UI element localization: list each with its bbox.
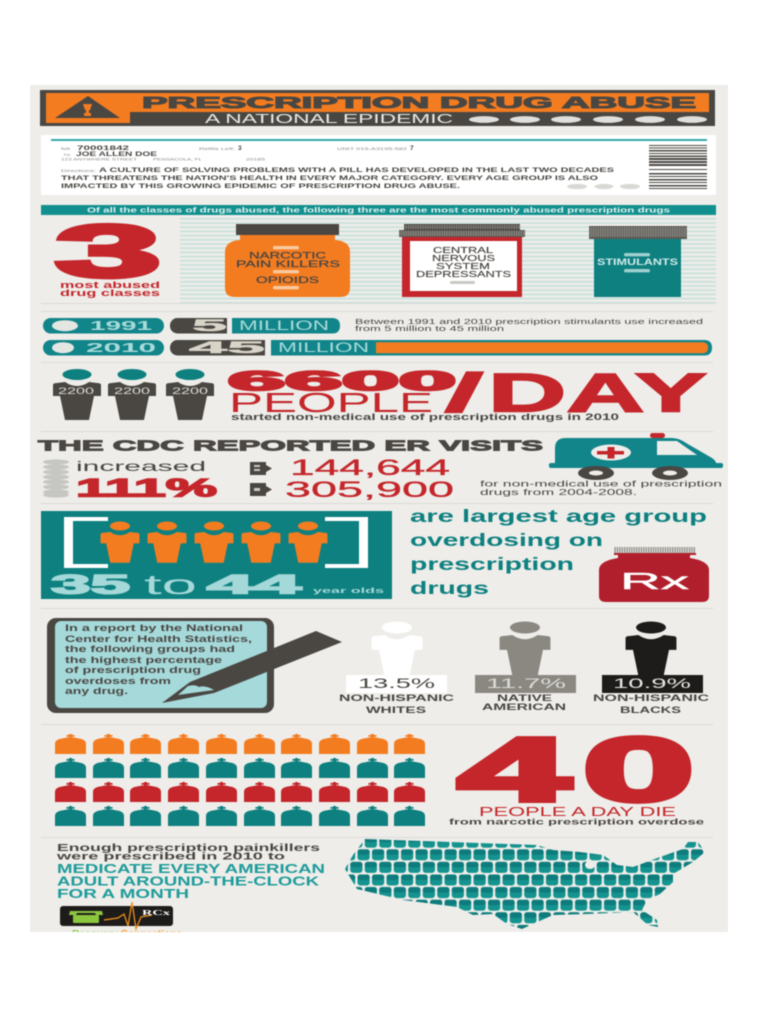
label small fields: For: [64, 152, 71, 157]
age group text: are largest age group [410, 506, 707, 526]
increased 111%: 111% [76, 474, 217, 502]
big number 40 [458, 720, 694, 820]
group: non-Hispanic blacks [593, 622, 710, 715]
group: Native American: AMERICAN [482, 702, 566, 712]
painkillers text: Enough prescription painkillers [57, 842, 320, 854]
stat description: Between 1991 and 2010 prescription stimulants use increased [355, 317, 703, 326]
label small fields: Refill [61, 146, 70, 151]
ER counts with icons: 144,644 [290, 455, 450, 480]
label small fields: Refills Left: [199, 146, 235, 151]
bottle: depressants [399, 224, 525, 297]
stat row: 2010: MILLION [278, 340, 369, 355]
background panel [30, 85, 728, 932]
icon: Rx bottle: Rx [620, 568, 690, 594]
6600 people per day: / [442, 361, 487, 424]
ER visits heading: THE CDC REPORTED ER VISITS [38, 438, 543, 454]
subtitle: A NATIONAL EPIDEMIC [205, 112, 453, 126]
group: non-Hispanic blacks: BLACKS [620, 705, 681, 715]
directions text: A CULTURE OF SOLVING PROBLEMS WITH A PILL HAS DEVELOPED IN THE LAST TWO DECADES [99, 167, 615, 174]
stat row: 1991 [43, 316, 340, 335]
big number 3: 3 [55, 210, 161, 292]
big number 40: 4 [458, 720, 570, 820]
group: non-Hispanic whites: WHITES [366, 705, 426, 715]
painkillers text: ADULT AROUND-THE-CLOCK [57, 874, 319, 888]
people icons 2200: 2200 [114, 386, 150, 397]
panel: report note: In a report by the National [65, 623, 243, 633]
panel: 35 to 44 [41, 511, 392, 600]
directions text [61, 167, 615, 190]
teal banner [41, 205, 716, 215]
people icons 2200: 2200 [58, 386, 94, 397]
stat row: 1991: MILLION [239, 318, 329, 333]
label small fields: JOE ALLEN DOE [76, 152, 157, 158]
bottle grid: 40 bottles [55, 734, 425, 826]
40 caption: from narcotic prescription overdose [449, 816, 704, 826]
ER counts with icons: 305,900 [285, 477, 454, 502]
label small fields [61, 145, 414, 162]
map: United States of pill cells [345, 839, 705, 929]
panel: report note: overdoses from [65, 676, 171, 686]
ER caption [480, 478, 722, 497]
label small fields: PENSACOLA, FL [153, 158, 202, 162]
people icons 2200 [53, 369, 214, 420]
group: non-Hispanic whites: 13.5% [358, 675, 435, 691]
big number 3: most abused [60, 280, 160, 291]
title: PRESCRIPTION DRUG ABUSE [142, 95, 696, 112]
age group text: prescription [410, 554, 574, 574]
small pills [567, 184, 640, 189]
painkillers text: MEDICATE EVERY AMERICAN [57, 862, 325, 876]
painkillers text: were prescribed in 2010 to [55, 850, 285, 862]
painkillers text [55, 842, 325, 901]
people icons 2200: 2200 [172, 386, 208, 397]
increased 111%: increased [76, 458, 206, 474]
age group text [410, 506, 707, 598]
6600 people per day [228, 361, 707, 424]
stat description [355, 317, 703, 333]
prescription label panel [41, 135, 716, 195]
directions text: Directions: [61, 168, 96, 173]
bottle: stimulants [589, 226, 687, 297]
ER caption: drugs from 2004-2008. [480, 487, 637, 497]
panel: 35 to 44: 35 [51, 570, 130, 600]
stat row: 2010 [43, 338, 712, 357]
stat row: 1991: 1991 [90, 318, 152, 333]
label small fields: 20185 [246, 158, 265, 162]
icon: pill stack [43, 459, 69, 498]
bottle: depressants: NERVOUS [432, 254, 496, 263]
panel: report note: any drug. [65, 686, 128, 696]
panel: report note [47, 618, 342, 713]
6600 caption: started non-medical use of prescription drugs in 2010 [231, 412, 619, 422]
label small fields: 7 [410, 145, 414, 152]
panel: 35 to 44: 44 [207, 570, 302, 600]
painkillers text: FOR A MONTH [57, 887, 189, 901]
group: non-Hispanic whites [339, 622, 455, 715]
panel: report note: the highest percentage [65, 655, 222, 665]
icon: warning triangle with mortar [55, 96, 120, 118]
stat row: 2010: 2010 [86, 340, 156, 355]
6600 people per day: DAY [488, 362, 707, 424]
panel: report note: the following groups had [65, 644, 235, 654]
panel: report note: of prescription drug [65, 665, 201, 675]
barcode [649, 145, 707, 189]
ER caption: for non-medical use of prescription [480, 478, 722, 488]
group: Native American [475, 622, 576, 712]
brackets [64, 517, 368, 568]
6600 people per day: PEOPLE [229, 387, 433, 418]
label small fields: 3 [238, 145, 242, 152]
group: Native American: NATIVE [497, 693, 552, 703]
big number 3: drug classes [60, 288, 160, 299]
label small fields: 123 ANYWHERE STREET [61, 158, 138, 162]
bottle: opioids [225, 224, 350, 297]
stat row: 2010: 45 [189, 338, 265, 357]
icon: pencil [162, 631, 342, 703]
group: non-Hispanic blacks: NON-HISPANIC [593, 693, 710, 703]
label small fields: 70001842 [77, 145, 130, 152]
age group text: drugs [410, 578, 489, 598]
bottle: opioids: OPIOIDS [256, 275, 319, 285]
logo: Recovery Connections: Recovery Connections [72, 929, 183, 938]
6600 people per day: 6600 [228, 366, 456, 396]
group: non-Hispanic blacks: 10.9% [613, 675, 691, 691]
orange people [101, 522, 327, 563]
panel: 35 to 44: year olds [313, 588, 384, 595]
bottle: opioids: NARCOTIC [249, 250, 327, 260]
big number 40: PEOPLE A DAY DIE [479, 804, 677, 819]
striped background [180, 218, 716, 303]
group: Native American: 11.7% [486, 675, 566, 691]
bottle: depressants: CENTRAL [433, 246, 494, 255]
increased 111% [76, 458, 217, 502]
bottle: opioids: PAIN KILLERS [236, 259, 340, 269]
age group text: overdosing on [410, 530, 603, 550]
icon: ambulance [549, 433, 723, 480]
bottle: depressants: SYSTEM [436, 262, 490, 271]
logo: Recovery Connections: RCx [142, 908, 170, 917]
ER counts with icons [250, 455, 454, 502]
directions text: THAT THREATENS THE NATION'S HEALTH IN EVERY MAJOR CATEGORY. EVERY AGE GROUP IS ALSO [61, 175, 598, 182]
label small fields: UNIT 015-A3195-582 [337, 146, 408, 151]
big number 3 [55, 210, 161, 299]
stat description: from 5 million to 45 million [355, 324, 504, 333]
pills row [469, 116, 707, 123]
teal banner: Of all the classes of drugs abused, the following three are the most commonly abused prescription drugs [87, 206, 670, 215]
panel: report note: Center for Health Statistics, [65, 634, 252, 644]
big number 40: 0 [583, 720, 694, 820]
bottle: depressants: DEPRESSANTS [416, 270, 512, 279]
stat row: 1991: 5 [192, 316, 227, 335]
icon: Rx bottle [599, 547, 709, 602]
title banner [40, 90, 715, 126]
directions text: IMPACTED BY THIS GROWING EPIDEMIC OF PRESCRIPTION DRUG ABUSE. [61, 183, 460, 190]
group: non-Hispanic whites: NON-HISPANIC [339, 693, 455, 703]
logo: Recovery Connections [60, 902, 183, 938]
bottle: stimulants: STIMULANTS [597, 257, 678, 267]
panel: 35 to 44: to [144, 569, 197, 600]
